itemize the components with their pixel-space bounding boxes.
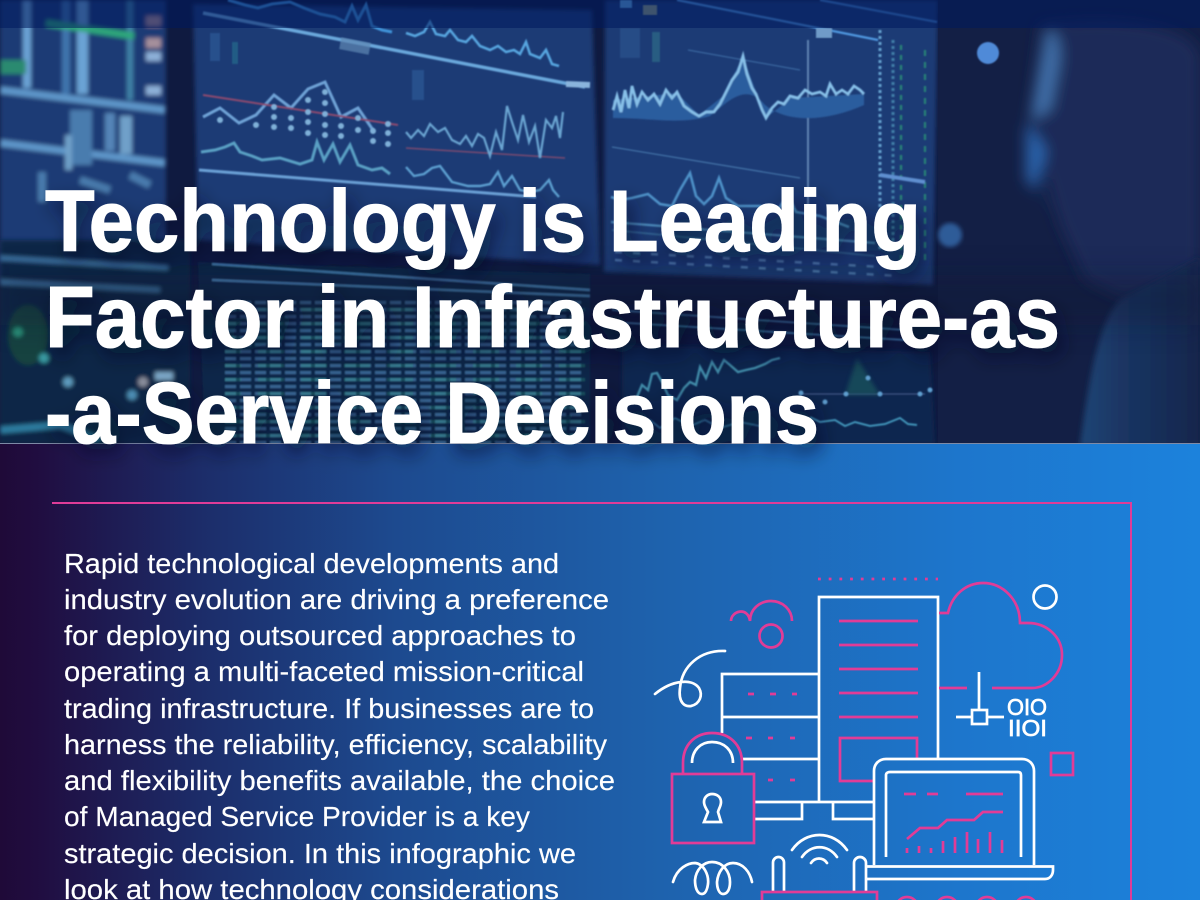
title: -a-Service Decisions — [45, 365, 819, 462]
trader silhouette — [938, 0, 1200, 446]
binary digits: IIOI — [1008, 715, 1047, 741]
data tables lower centre — [198, 262, 590, 444]
title: Technology is Leading — [45, 173, 921, 270]
title: Factor in Infrastructure-as — [45, 269, 1060, 366]
left monitor lower data — [0, 240, 190, 444]
icon: pink square — [1051, 753, 1073, 775]
icon: white circle — [1034, 586, 1056, 608]
intro text block — [64, 548, 615, 900]
icon: white squiggle — [655, 651, 725, 706]
intro text block: harness the reliability, efficiency, scalability — [64, 729, 607, 760]
intro text block: of Managed Service Provider is a key — [64, 801, 530, 832]
intro text block: trading infrastructure. If businesses are to — [64, 693, 594, 724]
infrastructure illustration — [655, 579, 1073, 900]
lower right monitor — [612, 310, 935, 444]
intro text block: operating a multi-faceted mission-critical — [64, 656, 584, 687]
centre monitor — [193, 0, 600, 265]
dark haze behind title — [0, 275, 1200, 325]
title — [45, 173, 1060, 462]
intro text block: strategic decision. In this infographic we — [64, 838, 576, 869]
intro text block: for deploying outsourced approaches to — [64, 620, 576, 651]
icon: wifi router — [762, 835, 877, 900]
hero photo: trading screens and trader — [0, 0, 1200, 446]
right monitor — [604, 0, 938, 285]
lower gradient background — [0, 444, 1200, 900]
icon: pink circles row — [896, 897, 1037, 900]
icon: network node — [956, 672, 1004, 724]
icon: server tower — [818, 579, 938, 802]
hero bottom edge — [0, 443, 1200, 444]
icon: large cloud — [939, 583, 1062, 688]
intro text block: Rapid technological developments and — [64, 548, 559, 579]
pink frame — [52, 503, 1131, 900]
trader shoulder — [1080, 257, 1200, 446]
top dark band — [0, 0, 1200, 28]
left monitor — [0, 0, 166, 280]
icon: server rack — [722, 674, 873, 819]
icon: padlock — [672, 733, 754, 843]
binary digits: OIO — [1007, 694, 1047, 720]
binary digits — [1007, 694, 1047, 741]
intro text block: industry evolution are driving a preference — [64, 584, 609, 615]
icon: white coil — [673, 862, 752, 894]
intro text block: and flexibility benefits available, the choice — [64, 765, 615, 796]
icon: laptop with chart — [866, 759, 1053, 879]
icon: small cloud — [731, 601, 792, 648]
